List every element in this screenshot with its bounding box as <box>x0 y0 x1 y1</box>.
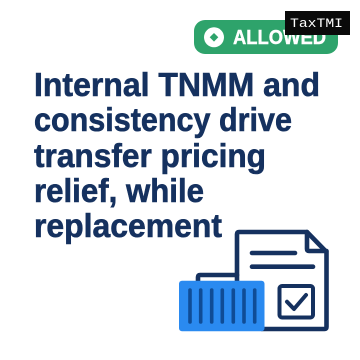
shipping container <box>179 281 264 331</box>
title: relief, while <box>34 172 204 209</box>
watermark: TaxTMI: TaxTMI <box>290 16 343 31</box>
title: consistency drive <box>34 101 292 138</box>
title <box>34 66 320 244</box>
watermark: TaxTMI <box>285 11 350 35</box>
document <box>198 232 326 329</box>
icon: document with checkbox and container <box>179 232 326 331</box>
title: Internal TNMM and <box>34 66 320 103</box>
title: replacement <box>34 207 222 244</box>
badge: allowed <box>194 20 338 54</box>
title: transfer pricing <box>34 137 266 174</box>
badge: allowed: ALLOWED <box>233 27 326 49</box>
